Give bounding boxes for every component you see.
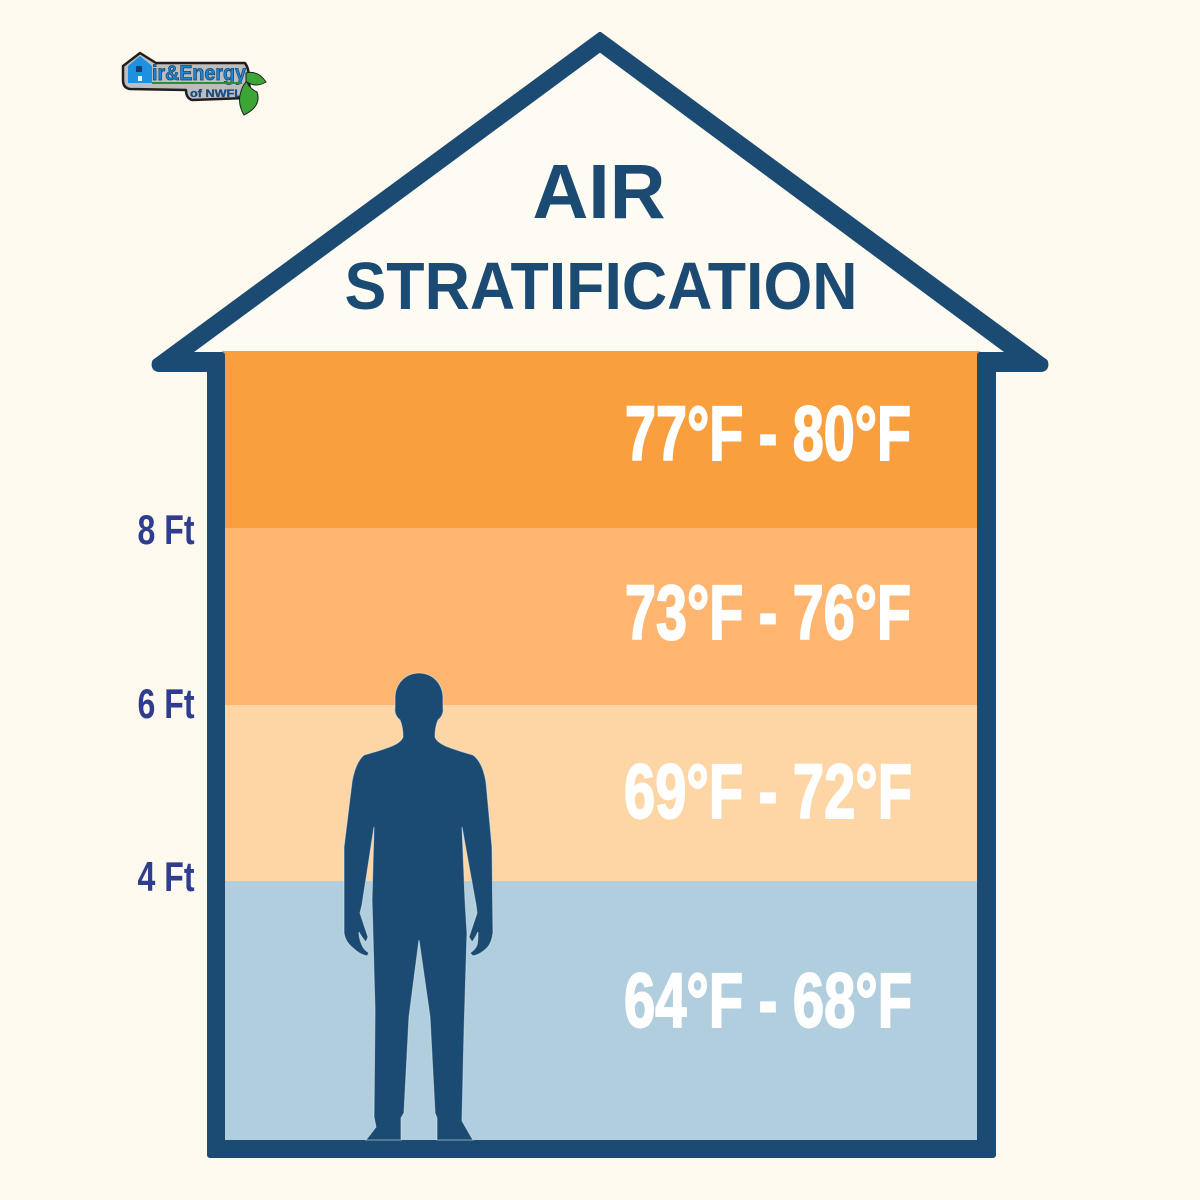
logo subtitle: of NWFL (190, 88, 242, 100)
title: STRATIFICATION: STRATIFICATION (344, 249, 858, 324)
logo green line (152, 82, 242, 84)
label: 64-68F: 64°F - 68°F (624, 958, 912, 1044)
logo wordmark: ir&Energy (152, 62, 246, 85)
label: 73-76F: 73°F - 76°F (625, 570, 911, 656)
icon: person silhouette (344, 673, 493, 1140)
logo door (138, 76, 142, 81)
logo leaves (240, 72, 266, 115)
band: top 77-80F (222, 351, 980, 529)
panel: roof interior (192, 52, 1006, 352)
band: 64-68F (222, 881, 980, 1143)
band: 73-76F (222, 528, 980, 706)
logo badge background (123, 53, 250, 100)
title: AIR: AIR (532, 149, 666, 235)
logo: Air & Energy of NWFL (123, 53, 266, 115)
panel: temperature bands (222, 351, 980, 1143)
house outline (155, 35, 1045, 1155)
logo window (136, 66, 142, 72)
label: 69-72F: 69°F - 72°F (624, 749, 912, 835)
height label: 6 Ft: 6 Ft (138, 680, 195, 727)
logo house icon (128, 56, 152, 83)
band: 69-72F (222, 705, 980, 882)
height label: 4 Ft: 4 Ft (138, 853, 195, 900)
label: 77-80F: 77°F - 80°F (625, 391, 911, 477)
height label: 8 Ft: 8 Ft (138, 506, 195, 553)
